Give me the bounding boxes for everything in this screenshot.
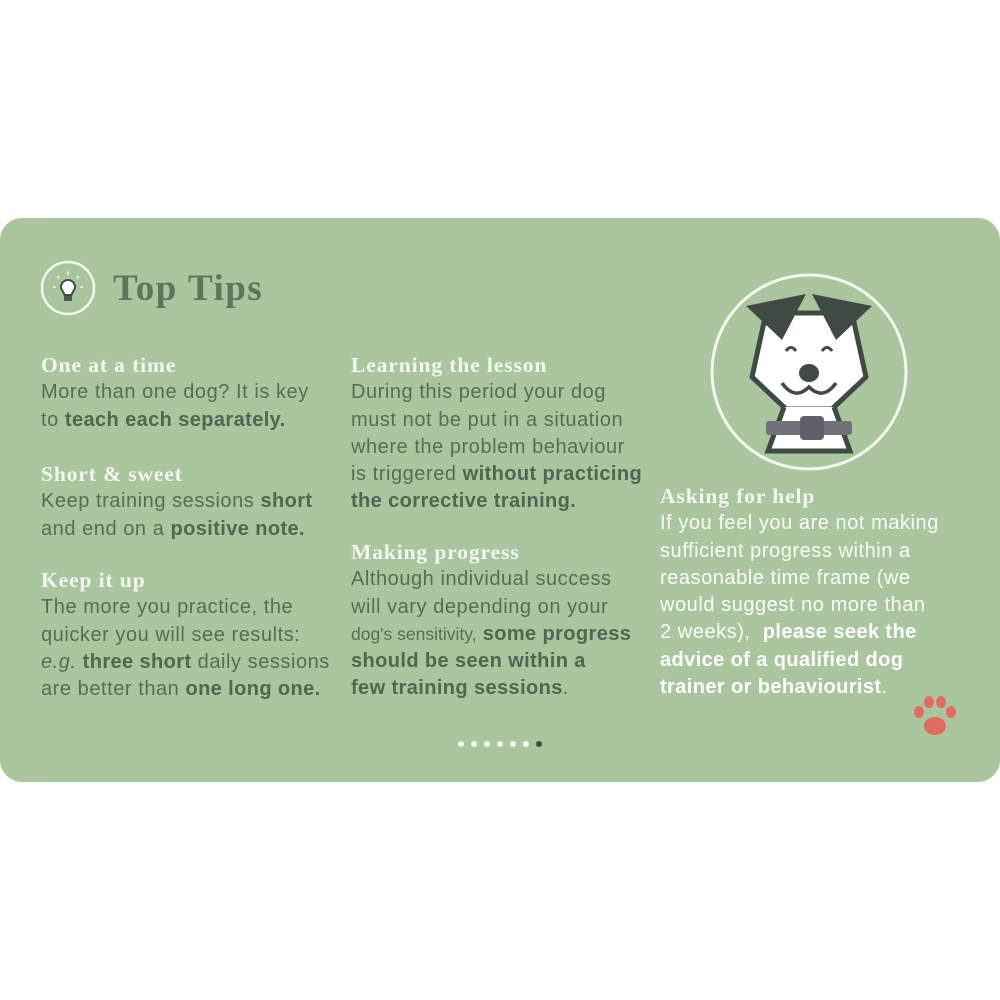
text block: keep it up: quicker you will see results:: [41, 624, 300, 646]
text block: one at a time: More than one dog? It is key: [41, 381, 309, 403]
text block: short & sweet: and end on a positive note.: [41, 518, 305, 540]
text block: asking for help: [660, 484, 939, 698]
illustration: dog in circle: [710, 274, 908, 470]
text block: asking for help: reasonable time frame (we: [660, 567, 911, 589]
pagination dots: [458, 741, 542, 747]
text block: asking for help: advice of a qualified dog: [660, 649, 903, 671]
text block: asking for help: Asking for help: [660, 484, 815, 508]
text block: one at a time: One at a time: [41, 353, 176, 377]
text block: keep it up: The more you practice, the: [41, 596, 293, 618]
panel: top tips card: [0, 218, 1000, 782]
text block: keep it up: are better than one long one.: [41, 678, 321, 700]
icon: paw: [914, 696, 956, 735]
text block: making progress: will vary depending on your: [351, 596, 608, 618]
text block: making progress: dog's sensitivity, some progress: [351, 623, 631, 645]
text block: asking for help: would suggest no more than: [660, 594, 926, 616]
text block: asking for help: sufficient progress within a: [660, 540, 911, 562]
text block: learning the lesson: Learning the lesson: [351, 353, 547, 377]
text block: keep it up: [41, 568, 330, 700]
title: Top Tips: [113, 268, 263, 309]
text block: asking for help: If you feel you are not making: [660, 512, 939, 534]
text block: learning the lesson: the corrective training.: [351, 490, 576, 512]
icon: lightbulb: [40, 260, 96, 316]
text block: making progress: Making progress: [351, 540, 520, 564]
text block: short & sweet: [41, 462, 312, 540]
text block: making progress: Although individual success: [351, 568, 612, 590]
text block: making progress: should be seen within a: [351, 650, 586, 672]
text block: learning the lesson: During this period your dog: [351, 381, 606, 403]
text block: keep it up: e.g. three short daily sessions: [41, 651, 330, 673]
text block: keep it up: Keep it up: [41, 568, 146, 592]
text block: one at a time: [41, 353, 309, 431]
text block: short & sweet: Keep training sessions short: [41, 490, 312, 512]
text block: asking for help: trainer or behaviourist.: [660, 676, 888, 698]
text block: learning the lesson: [351, 353, 642, 512]
text block: short & sweet: Short & sweet: [41, 462, 183, 486]
text block: learning the lesson: must not be put in a situation: [351, 409, 623, 431]
text block: learning the lesson: is triggered without practicing: [351, 463, 642, 485]
text block: one at a time: to teach each separately.: [41, 409, 286, 431]
text block: learning the lesson: where the problem behaviour: [351, 436, 625, 458]
text block: making progress: [351, 540, 631, 699]
text block: making progress: few training sessions.: [351, 677, 569, 699]
text block: asking for help: 2 weeks), please seek the: [660, 621, 917, 643]
